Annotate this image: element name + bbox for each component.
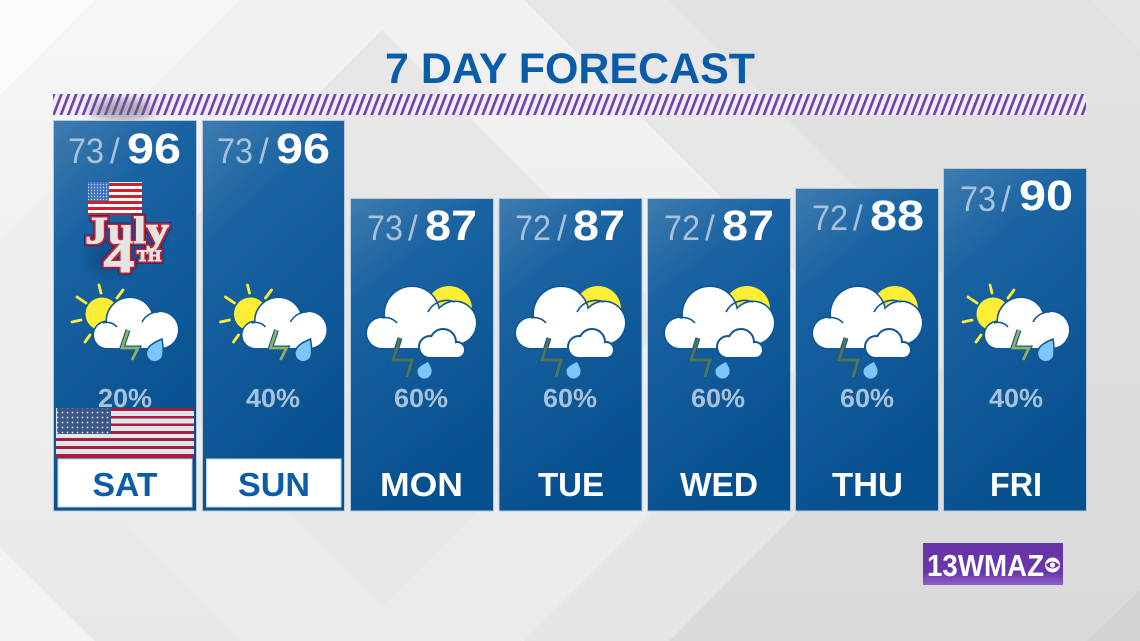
SAT temps xyxy=(68,125,181,173)
FRI temps xyxy=(960,172,1073,220)
icon: sun cloud storm xyxy=(963,285,1069,362)
THU temps: 88 xyxy=(870,192,924,240)
FRI label: FRI xyxy=(990,466,1042,503)
panel: TUE xyxy=(499,198,642,511)
icon: cloud sun storm xyxy=(813,286,922,379)
SAT temps: 96 xyxy=(127,125,181,173)
July 4th badge xyxy=(85,210,169,282)
SAT temps: 73 xyxy=(68,132,104,171)
SUN temps: 73 xyxy=(217,132,253,171)
SAT label: SAT xyxy=(92,466,158,503)
panel: FRI xyxy=(944,168,1086,511)
WED temps xyxy=(664,202,774,250)
SUN label xyxy=(206,459,341,507)
July 4th badge: 4 xyxy=(104,231,134,282)
striped banner xyxy=(53,94,1086,115)
MON temps xyxy=(367,202,477,250)
icon: sun cloud storm xyxy=(72,285,178,362)
panel: WED xyxy=(648,198,790,511)
SAT temps: / xyxy=(110,132,120,171)
THU temps xyxy=(812,192,924,240)
WED temps: 87 xyxy=(722,202,774,250)
SAT precipitation: 20% xyxy=(98,383,152,413)
WED label: WED xyxy=(680,466,758,503)
icon: small american flag xyxy=(88,182,142,215)
TUE temps: / xyxy=(557,209,567,248)
smudge xyxy=(90,99,154,121)
FRI temps: 90 xyxy=(1019,172,1073,220)
icon: cloud sun storm xyxy=(665,286,774,379)
icon: cloud sun storm xyxy=(367,286,476,379)
MON temps: 73 xyxy=(367,209,403,248)
FRI temps: 73 xyxy=(960,180,996,219)
SUN precipitation: 40% xyxy=(246,383,300,413)
TUE temps xyxy=(515,202,625,250)
icon: sun cloud storm xyxy=(220,285,326,362)
SUN label: SUN xyxy=(238,466,310,503)
MON temps: / xyxy=(408,209,418,248)
logo: 13WMAZ CBS: 13WMAZ xyxy=(927,548,1044,583)
icon: large american flag xyxy=(56,408,194,458)
SUN temps: / xyxy=(259,132,269,171)
SUN temps xyxy=(217,125,330,173)
FRI precipitation: 40% xyxy=(989,383,1043,413)
WED precipitation: 60% xyxy=(691,383,745,413)
SUN temps: 96 xyxy=(276,125,330,173)
THU precipitation: 60% xyxy=(840,383,894,413)
SAT label xyxy=(58,459,192,507)
July 4th badge: TH xyxy=(137,248,162,265)
WED temps: 72 xyxy=(664,209,700,248)
panel: SAT xyxy=(54,120,196,511)
panel: SUN xyxy=(202,120,344,511)
FRI temps: / xyxy=(1001,180,1011,219)
THU temps: / xyxy=(853,199,863,238)
TUE temps: 72 xyxy=(515,209,551,248)
THU temps: 72 xyxy=(812,199,848,238)
July 4th badge: July xyxy=(85,210,169,252)
title: 7 DAY FORECAST xyxy=(385,45,755,93)
TUE label: TUE xyxy=(538,466,604,503)
icon: cloud sun storm xyxy=(516,286,625,379)
WED temps: / xyxy=(705,209,715,248)
MON temps: 87 xyxy=(425,202,477,250)
THU label: THU xyxy=(832,466,903,503)
panel: THU xyxy=(796,188,938,511)
TUE temps: 87 xyxy=(573,202,625,250)
speckle xyxy=(86,240,138,276)
TUE precipitation: 60% xyxy=(543,383,597,413)
MON label: MON xyxy=(380,466,463,503)
MON precipitation: 60% xyxy=(394,383,448,413)
panel: MON xyxy=(350,198,494,511)
